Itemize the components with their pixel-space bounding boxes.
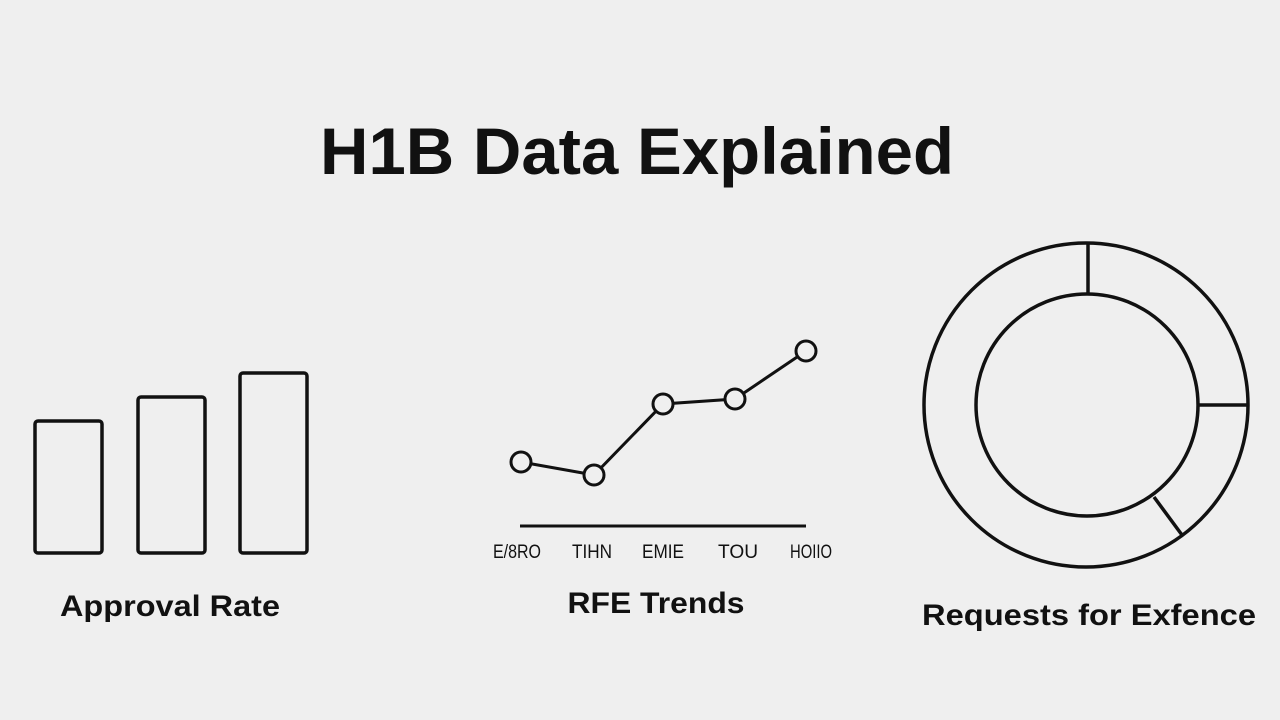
axis labels: TOU — [718, 542, 758, 563]
title: H1B Data Explained — [320, 114, 954, 188]
panel: approval rate bar chart — [35, 373, 307, 553]
axis labels: HOIIO — [790, 542, 832, 563]
panel: RFE trends line chart — [493, 341, 832, 563]
panel: donut chart — [924, 243, 1248, 567]
bar 2 — [138, 397, 205, 553]
label: RFE trends: RFE Trends — [568, 587, 744, 620]
label: approval rate: Approval Rate — [60, 590, 280, 623]
outer ring — [924, 243, 1248, 567]
segment dividers — [1086, 244, 1090, 294]
label: requests for evidence: Requests for Exfence — [922, 599, 1256, 632]
axis labels — [493, 542, 832, 563]
axis labels: TIHN — [572, 542, 612, 563]
trend line — [521, 351, 806, 475]
bar 3 — [240, 373, 307, 553]
axis labels: EMIE — [642, 542, 684, 563]
inner ring — [976, 294, 1198, 516]
bar 1 — [35, 421, 102, 553]
data points — [511, 341, 816, 485]
axis labels: E/8RO — [493, 542, 541, 563]
x axis — [520, 524, 806, 528]
